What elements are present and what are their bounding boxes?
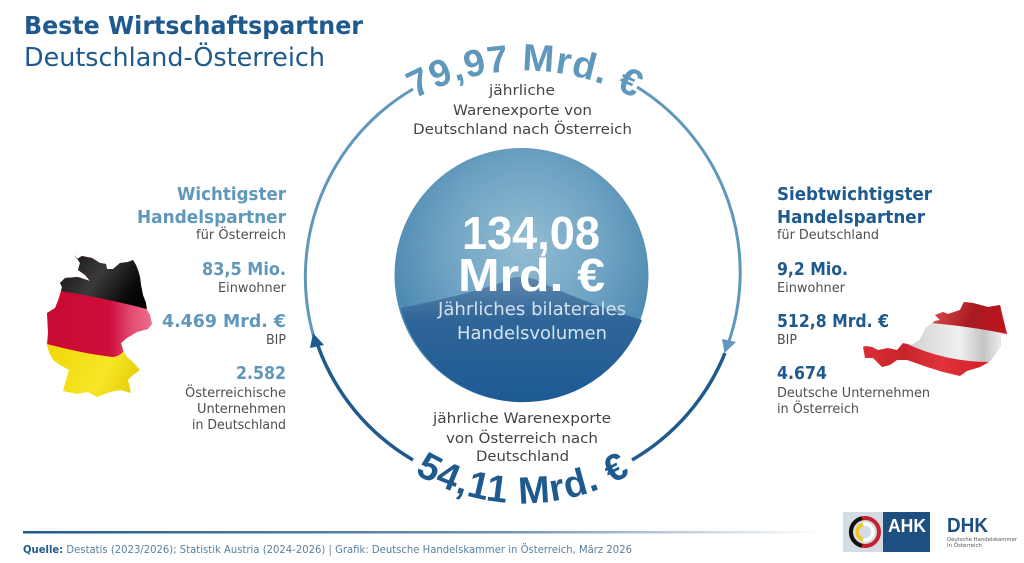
stat: GDP — [162, 311, 286, 348]
heading: Siebtwichtigster Handelspartner — [777, 184, 932, 243]
footer rule — [23, 531, 823, 534]
arrow: exports Germany to Austria, left arc — [305, 89, 413, 336]
stat: population: Einwohner — [777, 281, 846, 296]
stat: population: 83,5 Mio. — [202, 259, 286, 280]
stat: companies: 4.674 — [777, 363, 827, 384]
logo: AHK: AHK — [888, 516, 926, 536]
panel: Germany facts — [137, 184, 287, 433]
stat: GDP: 512,8 Mrd. € — [777, 311, 889, 332]
logo: DHK: Deutsche Handelskammer — [947, 537, 1018, 543]
stat: population: Einwohner — [218, 281, 287, 296]
stat: companies: in Deutschland — [192, 418, 286, 433]
stat: companies: Deutsche Unternehmen — [777, 386, 930, 401]
top caption: Warenexporte von — [453, 103, 592, 119]
centre disc — [394, 148, 648, 402]
heading: Siebtwichtigster Handelspartner: Siebtwichtigster — [777, 184, 932, 205]
stat: companies: 2.582 — [236, 363, 286, 384]
stat: companies: Unternehmen — [197, 402, 286, 417]
title — [24, 11, 364, 73]
stat: companies — [777, 363, 930, 417]
stat: population — [777, 259, 848, 296]
logo: DHK: in Österreich — [947, 542, 983, 549]
stat: GDP: BIP — [777, 333, 797, 348]
top caption: jährliche — [488, 83, 555, 99]
arrow: exports Germany to Austria, right arc with arrowhead — [637, 87, 740, 353]
bottom caption — [432, 411, 611, 465]
top value 79,97 Mrd. €: 79,97 Mrd. € — [404, 44, 643, 96]
disc lower hill — [400, 277, 642, 402]
logo: DHK: DHK — [947, 515, 989, 537]
arrow: exports Austria to Germany, right arc — [632, 353, 725, 460]
heading: Wichtigster Handelspartner: für Österreich — [196, 226, 286, 243]
top caption: Deutschland nach Österreich — [413, 120, 632, 138]
disc value: 134,08 — [462, 207, 600, 259]
heading: Wichtigster Handelspartner: Wichtigster — [177, 184, 286, 205]
disc caption — [437, 299, 626, 344]
logo: DHK — [947, 515, 1018, 549]
title: Beste Wirtschaftspartner — [24, 11, 364, 40]
heading: Wichtigster Handelspartner — [137, 184, 286, 243]
disc value: Mrd. € — [458, 249, 605, 301]
bottom value 54,11 Mrd. €: 54,11 Mrd. € — [418, 452, 628, 504]
source line: Quelle: Destatis (2023/2026); Statistik Austria (2024-2026) | Grafik: Deutsche Handelskammer in Österreich, März 2026 — [23, 543, 632, 556]
stat: population — [202, 259, 287, 296]
heading: Wichtigster Handelspartner: Handelspartner — [137, 207, 286, 228]
title: Deutschland-Österreich — [24, 41, 325, 73]
icon: Germany flag map — [47, 254, 152, 397]
stat: population: 9,2 Mio. — [777, 259, 848, 280]
heading: Siebtwichtigster Handelspartner: Handelspartner — [777, 207, 925, 228]
stat: companies — [185, 363, 286, 433]
bottom caption: von Österreich nach — [446, 429, 598, 447]
panel: Austria facts — [777, 184, 932, 417]
heading: Siebtwichtigster Handelspartner: für Deutschland — [777, 228, 879, 243]
top caption — [413, 83, 632, 138]
logo: AHK — [843, 512, 930, 552]
bottom caption: jährliche Warenexporte — [432, 411, 611, 427]
disc caption: Jährliches bilaterales — [437, 299, 626, 320]
stat: GDP — [777, 311, 889, 348]
disc caption: Handelsvolumen — [457, 323, 607, 344]
stat: companies: in Österreich — [777, 400, 859, 417]
stat: GDP: BIP — [266, 333, 286, 348]
stat: companies: Österreichische — [185, 384, 286, 401]
icon: Austria flag map — [863, 302, 1007, 376]
arrow: exports Austria to Germany, left arc with arrowhead — [310, 333, 413, 460]
disc value — [458, 207, 605, 301]
bottom caption: Deutschland — [476, 449, 569, 465]
stat: GDP: 4.469 Mrd. € — [162, 311, 286, 332]
